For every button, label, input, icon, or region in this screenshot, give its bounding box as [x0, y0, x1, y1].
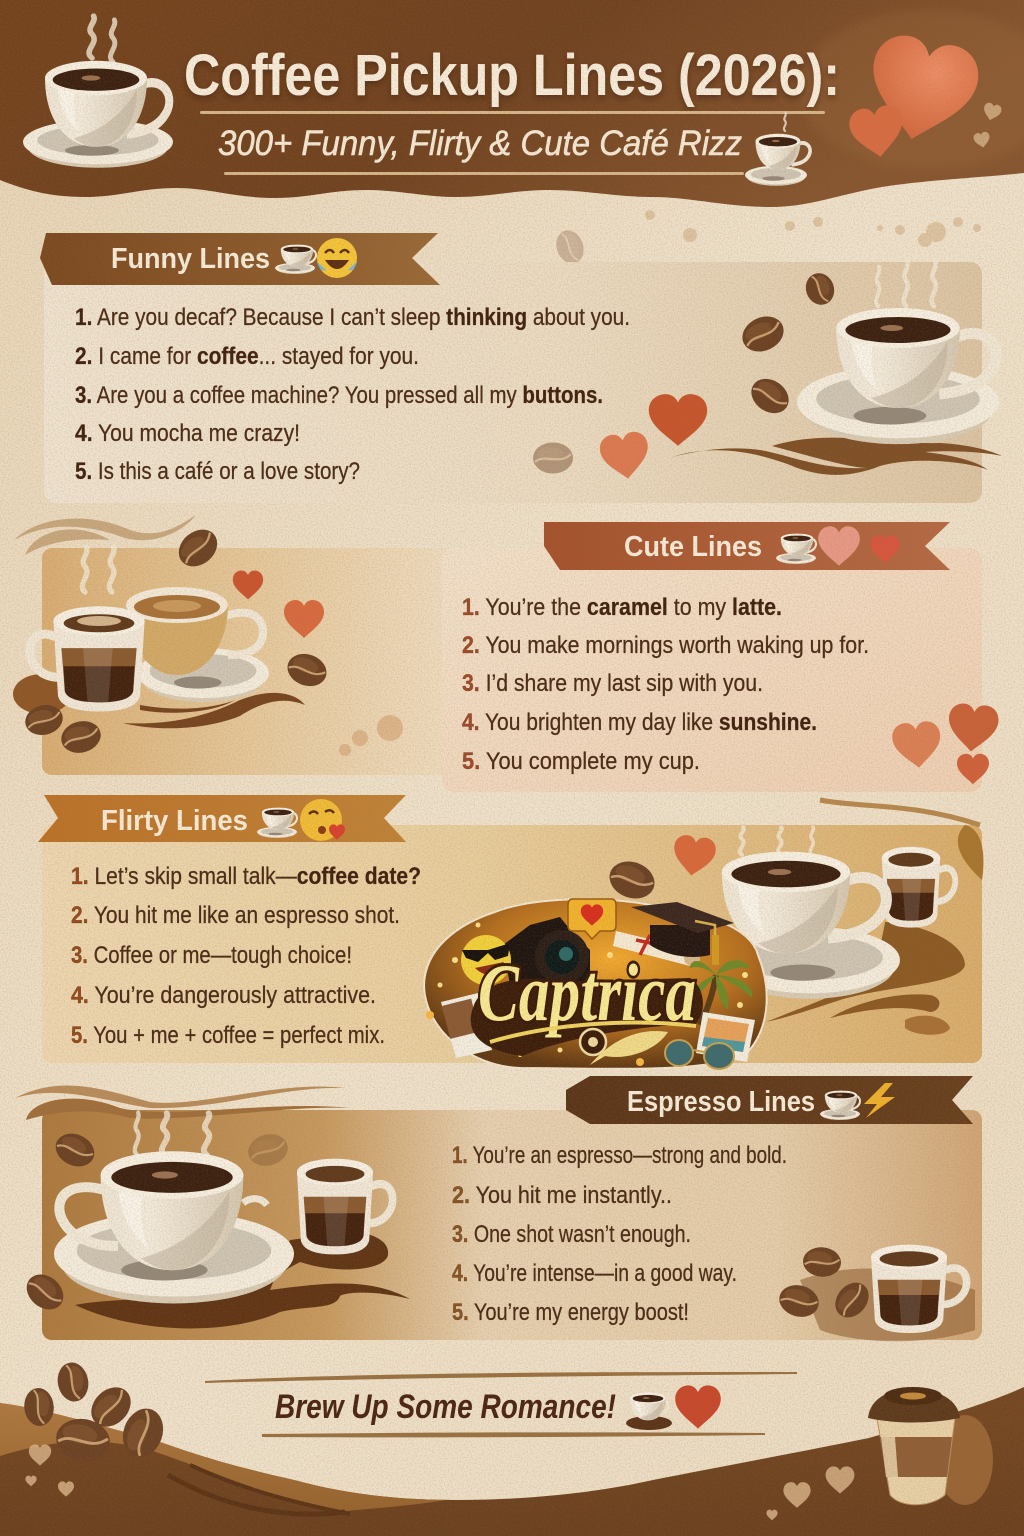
heading: funny lines ribbon [40, 233, 440, 285]
text block: espresso lines: 3. One shot wasn’t enough. [452, 1221, 691, 1248]
heading: espresso lines ribbon [566, 1076, 973, 1124]
illustration: flirty coffee cups [604, 800, 983, 1035]
footer band [0, 1380, 1024, 1536]
panel: espresso lines [15, 1085, 982, 1341]
logo smiley with sunglasses [461, 935, 511, 985]
text block: funny lines: 1. Are you decaf? Because I can’t sleep thinking about you. [75, 304, 630, 331]
icon: laughing emoji [317, 238, 357, 278]
text block: cute lines: 5. You complete my cup. [462, 748, 700, 775]
footer slogan: Brew Up Some Romance! [275, 1388, 616, 1426]
logo sparkles [426, 922, 748, 1066]
logo aperture and feather [580, 1029, 668, 1065]
icon: espresso ribbon cup [820, 1091, 860, 1120]
logo graduation cap [631, 902, 734, 965]
logo banner and wordmark: Captrica [478, 947, 696, 1038]
logo speech bubble heart [568, 899, 616, 939]
footer hearts [25, 1444, 854, 1520]
footer slogan [205, 1372, 797, 1437]
icon: cute ribbon cup [776, 534, 816, 564]
icon: footer coffee beans [23, 1360, 170, 1465]
heading: cute lines ribbon [544, 522, 950, 570]
icon: cute panel hearts [891, 702, 1000, 784]
icon: header coffee cup [23, 16, 173, 168]
text block: flirty lines: 2. You hit me like an espresso shot. [71, 902, 400, 929]
heading: funny lines ribbon: Funny Lines [111, 243, 270, 275]
panel: funny lines [44, 261, 1002, 503]
text block: funny lines: 2. I came for coffee... stayed for you. [75, 343, 419, 370]
text block: espresso lines: 4. You’re intense—in a good way. [452, 1260, 737, 1287]
coffee stains [645, 210, 981, 247]
subtitle with rules [200, 111, 825, 175]
subtitle with rules: 300+ Funny, Flirty & Cute Café Rizz [218, 124, 742, 163]
header band [0, 0, 1024, 210]
icon: footer cup and heart [626, 1385, 721, 1430]
icon: small subtitle cup [745, 113, 810, 186]
text block: cute lines: 1. You’re the caramel to my latte. [462, 594, 782, 621]
heading: espresso lines ribbon: Espresso Lines [627, 1086, 815, 1118]
text block: cute lines: 4. You brighten my day like sunshine. [462, 709, 817, 736]
icon: faint bean near funny ribbon [552, 227, 588, 267]
icon: kissing emoji [300, 799, 345, 841]
logo diploma scroll [613, 931, 700, 966]
illustration: funny coffee cup and hearts [533, 261, 1002, 482]
text block: funny lines: 5. Is this a café or a love story? [75, 458, 360, 485]
logo camera [503, 917, 590, 985]
text block: flirty lines: 3. Coffee or me—tough choice! [71, 942, 352, 969]
logo: Captrica badge [424, 899, 767, 1069]
title: Coffee Pickup Lines (2026): [184, 43, 840, 108]
text block: funny lines [75, 304, 630, 485]
icon: lightning bolt [864, 1083, 895, 1118]
illustration: cute coffee cups [13, 515, 403, 757]
text block: cute lines: 3. I’d share my last sip with you. [462, 670, 763, 697]
logo sunglasses [665, 1040, 734, 1069]
text block: cute lines: 2. You make mornings worth waking up for. [462, 632, 869, 659]
logo banner and wordmark [471, 947, 703, 1056]
heading: flirty lines ribbon [38, 795, 406, 842]
text block: espresso lines: 1. You’re an espresso—strong and bold. [452, 1142, 787, 1169]
text block: flirty lines: 4. You’re dangerously attractive. [71, 982, 376, 1009]
panel: flirty lines [42, 800, 983, 1063]
text block: cute lines [462, 594, 869, 775]
text block: flirty lines: 5. You + me + coffee = perfect mix. [71, 1022, 385, 1049]
icon: header hearts [847, 30, 1003, 161]
heading: flirty lines ribbon: Flirty Lines [101, 805, 248, 837]
icon: cute ribbon hearts [818, 526, 899, 566]
heading: cute lines ribbon: Cute Lines [624, 531, 762, 563]
text block: espresso lines: 5. You’re my energy boost! [452, 1299, 689, 1326]
text block: funny lines: 4. You mocha me crazy! [75, 420, 300, 447]
text block: espresso lines: 2. You hit me instantly.. [452, 1182, 672, 1209]
text block: funny lines: 3. Are you a coffee machine? You pressed all my buttons. [75, 382, 603, 409]
text block: flirty lines: 1. Let’s skip small talk—coffee date? [71, 863, 421, 890]
logo photos [441, 993, 755, 1062]
panel: cute lines [13, 515, 1000, 792]
icon: ribbon cup [275, 245, 316, 274]
text block: espresso lines [452, 1142, 787, 1326]
text block: flirty lines [71, 863, 421, 1049]
illustration: espresso cups [15, 1085, 975, 1341]
icon: flirty ribbon cup [257, 808, 297, 838]
icon: takeaway coffee cup [868, 1387, 960, 1505]
logo palm tree [690, 960, 752, 1025]
